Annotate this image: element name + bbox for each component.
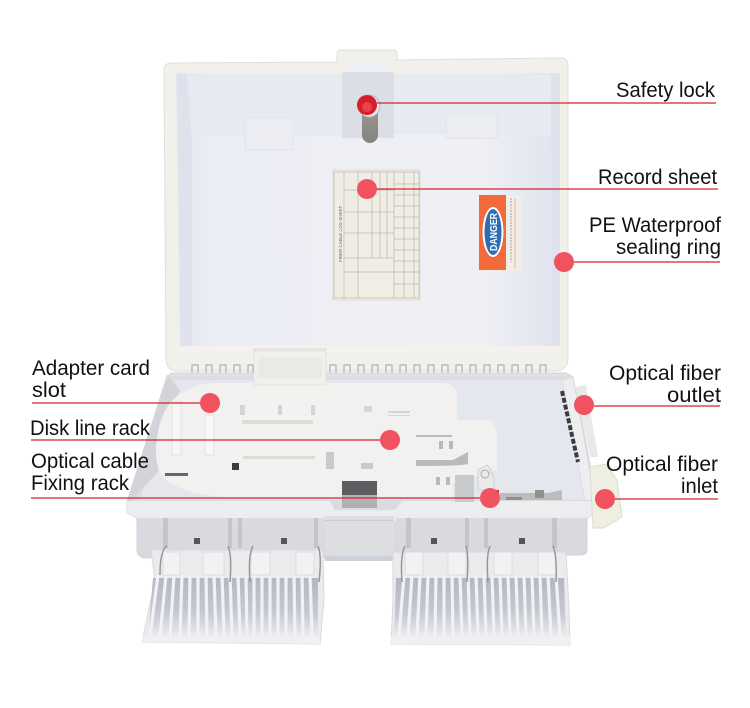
record sheet: FIBER CABLE LOG SHEET — [338, 205, 343, 262]
open base tray — [127, 373, 597, 558]
danger label: DANGER — [489, 212, 500, 251]
callout: Optical cable Fixing rack — [31, 450, 500, 508]
callout: Record sheet: Record sheet — [598, 166, 717, 189]
hinge slots — [192, 365, 546, 374]
callout: Optical fiber outlet: Optical fiber — [609, 362, 721, 385]
callout: PE Waterproof sealing ring: PE Waterproof — [589, 214, 721, 237]
callout: Record sheet — [357, 166, 718, 199]
callout: Optical fiber outlet — [574, 362, 721, 415]
callout: Optical fiber inlet — [595, 453, 718, 509]
left clip cover with fins — [142, 546, 324, 644]
callout: Optical fiber outlet: outlet — [667, 384, 721, 407]
callout: Adapter card slot: slot — [32, 379, 66, 402]
callout: Disk line rack: Disk line rack — [30, 417, 150, 440]
callout: PE Waterproof sealing ring — [554, 214, 721, 272]
callout: PE Waterproof sealing ring: sealing ring — [616, 236, 721, 259]
callout: Adapter card slot: Adapter card — [32, 357, 150, 380]
callout: Optical fiber inlet: inlet — [681, 475, 718, 498]
callout: Optical cable Fixing rack: Fixing rack — [31, 472, 129, 495]
danger label — [479, 195, 522, 271]
open lid — [164, 50, 568, 374]
right clip cover with fins — [391, 546, 570, 645]
optical fiber outlet ports — [562, 385, 598, 462]
optical fiber inlet gland — [590, 464, 622, 528]
disk line rack (white fiber tray) — [156, 351, 497, 502]
record sheet — [333, 170, 420, 300]
lock bolt and latch — [357, 95, 380, 143]
callout: Safety lock: Safety lock — [616, 79, 715, 102]
callout: Optical cable Fixing rack: Optical cable — [31, 450, 149, 473]
callout: Optical fiber inlet: Optical fiber — [606, 453, 718, 476]
metal fixing bracket — [342, 481, 562, 508]
front wall notches — [163, 518, 557, 561]
callout: Adapter card slot — [32, 357, 220, 413]
callout: Disk line rack — [30, 417, 400, 450]
